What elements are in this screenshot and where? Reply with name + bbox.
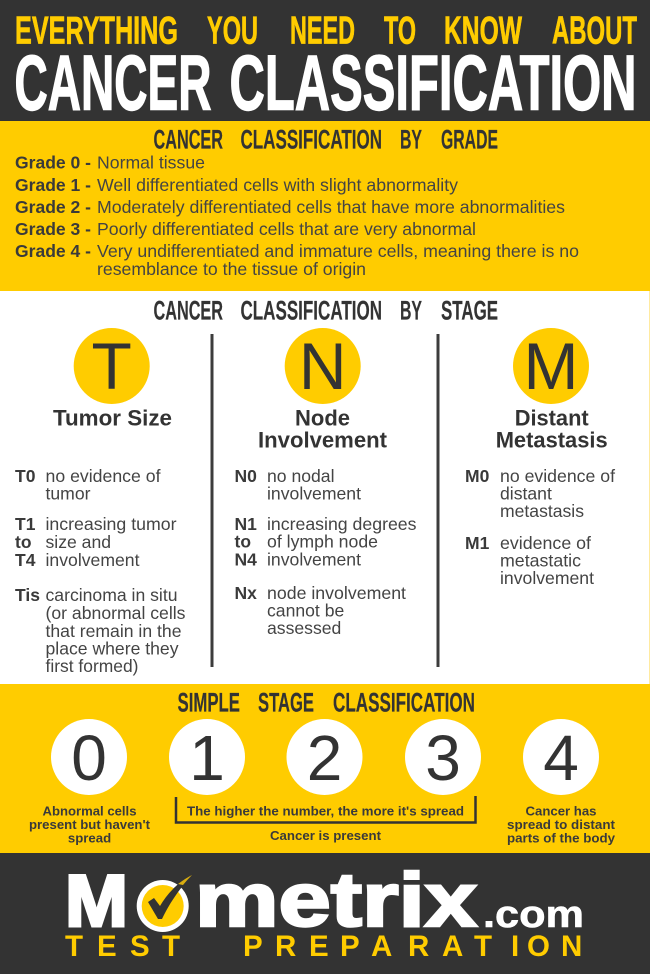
N definitions: of lymph node (267, 532, 378, 552)
title: everything you need to know about: YOU (207, 10, 258, 52)
T definitions: T1 (15, 514, 36, 534)
caption: stage 0 (29, 804, 151, 846)
M definitions: M0 (465, 466, 490, 486)
stage 0 (51, 719, 127, 795)
M definitions: involvement (500, 568, 594, 588)
M definitions: distant (500, 484, 552, 504)
M definitions: M1 (465, 533, 490, 553)
grade list: Very undifferentiated and immature cells, meaning there is no (97, 241, 579, 261)
icon: check circle (137, 875, 192, 932)
heading: simple stage classification: STAGE (258, 688, 314, 718)
M definitions: metastatic (500, 550, 581, 570)
stage 4 (523, 719, 599, 795)
heading: tumor size: Tumor Size (53, 406, 172, 430)
caption: stage 0: spread (68, 830, 111, 846)
N definitions: no nodal (267, 466, 335, 486)
icon: N circle: N (299, 329, 347, 403)
T definitions: tumor (46, 484, 91, 504)
icon: T circle: T (92, 329, 132, 403)
N definitions: node involvement (267, 583, 406, 603)
N definitions: involvement (267, 550, 361, 570)
T definitions: T0 (15, 466, 36, 486)
caption: stage 4: Cancer has (526, 804, 596, 818)
T definitions: increasing tumor (46, 514, 177, 534)
logo: test preparation (65, 930, 582, 963)
icon: T circle (74, 328, 150, 404)
heading: by grade: CLASSIFICATION (240, 124, 382, 154)
heading: distant metastasis (496, 406, 608, 452)
stage 4: 4 (543, 722, 579, 794)
grade list: Grade 2 - (15, 197, 91, 217)
panel: classification by grade (0, 121, 650, 291)
logo: test preparation: TEST (65, 930, 180, 963)
title: everything you need to know about: EVERYTHING (15, 10, 178, 52)
heading: distant metastasis: Distant (515, 406, 589, 430)
logo: mometrix.com (65, 858, 584, 943)
caption: stage 4: spread to distant (507, 817, 616, 832)
heading: simple stage classification: CLASSIFICATION (333, 688, 475, 718)
grade list: resemblance to the tissue of origin (97, 259, 366, 279)
column: M distant metastasis (465, 328, 615, 588)
stage 3: 3 (425, 722, 461, 794)
T definitions: no evidence of (46, 466, 161, 486)
title: cancer classification (14, 38, 636, 126)
heading: by grade: CANCER (154, 124, 223, 154)
heading: by stage: BY (400, 296, 422, 326)
stage 0: 0 (71, 722, 107, 794)
N definitions: increasing degrees (267, 514, 417, 534)
heading: by grade (154, 124, 498, 154)
icon: M circle: M (524, 329, 578, 403)
stage 2 (286, 719, 362, 795)
heading: by stage: CLASSIFICATION (240, 296, 382, 326)
column: N node involvement (234, 328, 417, 638)
T definitions: Tis (15, 585, 40, 605)
caption: stages 1 to 3 (187, 804, 464, 843)
M definitions: metastasis (500, 501, 584, 521)
heading: by stage: STAGE (441, 296, 498, 326)
N definitions: to (234, 532, 251, 552)
panel: footer logo (0, 853, 650, 974)
caption: stage 4 (507, 804, 616, 846)
heading: node involvement: Involvement (258, 428, 388, 452)
bracket: stages 1 to 3 (176, 796, 476, 822)
T definitions: that remain in the (46, 621, 182, 641)
logo: mometrix.com: .com (483, 894, 584, 936)
grade list: Grade 0 - (15, 152, 91, 172)
heading: node involvement: Node (295, 406, 350, 430)
N definitions: N4 (234, 550, 257, 570)
T definitions: size and (46, 532, 111, 552)
grade list: Grade 3 - (15, 219, 91, 239)
T definitions: first formed) (46, 656, 138, 676)
panel: header (0, 0, 650, 126)
heading: by grade: BY (400, 124, 422, 154)
T definitions: carcinoma in situ (46, 585, 178, 605)
heading: node involvement (258, 406, 388, 452)
logo: mometrix.com: metrix (195, 858, 477, 943)
grade list: Well differentiated cells with slight abnormality (97, 175, 458, 195)
title: everything you need to know about: KNOW (444, 10, 522, 52)
caption: stage 4: parts of the body (507, 830, 616, 846)
heading: by grade: GRADE (441, 124, 498, 154)
heading: simple stage classification: SIMPLE (178, 688, 240, 718)
caption: stages 1 to 3: The higher the number, the more it's spread (187, 804, 464, 818)
heading: distant metastasis: Metastasis (496, 428, 608, 452)
T definitions: to (15, 532, 32, 552)
caption: stage 0: present but haven't (29, 817, 151, 832)
N definitions: N1 (234, 514, 257, 534)
M definitions (465, 466, 615, 588)
N definitions: Nx (234, 583, 257, 603)
N definitions: assessed (267, 618, 341, 638)
heading: simple stage classification (178, 688, 475, 718)
panel: classification by stage (0, 291, 650, 684)
stage 1 (169, 719, 245, 795)
heading: by stage (154, 296, 498, 326)
N definitions: cannot be (267, 600, 344, 620)
title: cancer classification: CANCER (14, 38, 212, 126)
title: everything you need to know about: TO (384, 10, 416, 52)
N definitions (234, 466, 417, 638)
grade list (15, 152, 579, 279)
stage 1: 1 (189, 722, 225, 794)
grade list: Normal tissue (97, 152, 205, 172)
heading: by stage: CANCER (154, 296, 223, 326)
stage 2: 2 (307, 722, 342, 794)
N definitions: involvement (267, 484, 361, 504)
T definitions: T4 (15, 550, 36, 570)
logo: test preparation: PREPARATION (243, 930, 582, 963)
grade list: Grade 4 - (15, 241, 91, 261)
grade list: Grade 1 - (15, 175, 91, 195)
icon: N circle (285, 328, 361, 404)
title: everything you need to know about: NEED (290, 10, 355, 52)
column: T tumor size (15, 328, 186, 676)
caption: stage 0: Abnormal cells (42, 804, 136, 818)
T definitions: place where they (46, 638, 179, 658)
logo: mometrix.com: M (65, 861, 128, 942)
stage 3 (405, 719, 481, 795)
T definitions: involvement (46, 550, 140, 570)
panel: simple stage classification (0, 684, 650, 853)
T definitions (15, 466, 186, 676)
M definitions: no evidence of (500, 466, 615, 486)
title: everything you need to know about (15, 10, 637, 52)
N definitions: N0 (234, 466, 257, 486)
T definitions: (or abnormal cells (46, 603, 186, 623)
grade list: Moderately differentiated cells that have more abnormalities (97, 197, 565, 217)
M definitions: evidence of (500, 533, 591, 553)
grade list: Poorly differentiated cells that are very abnormal (97, 219, 476, 239)
caption: stages 1 to 3: Cancer is present (270, 828, 382, 843)
